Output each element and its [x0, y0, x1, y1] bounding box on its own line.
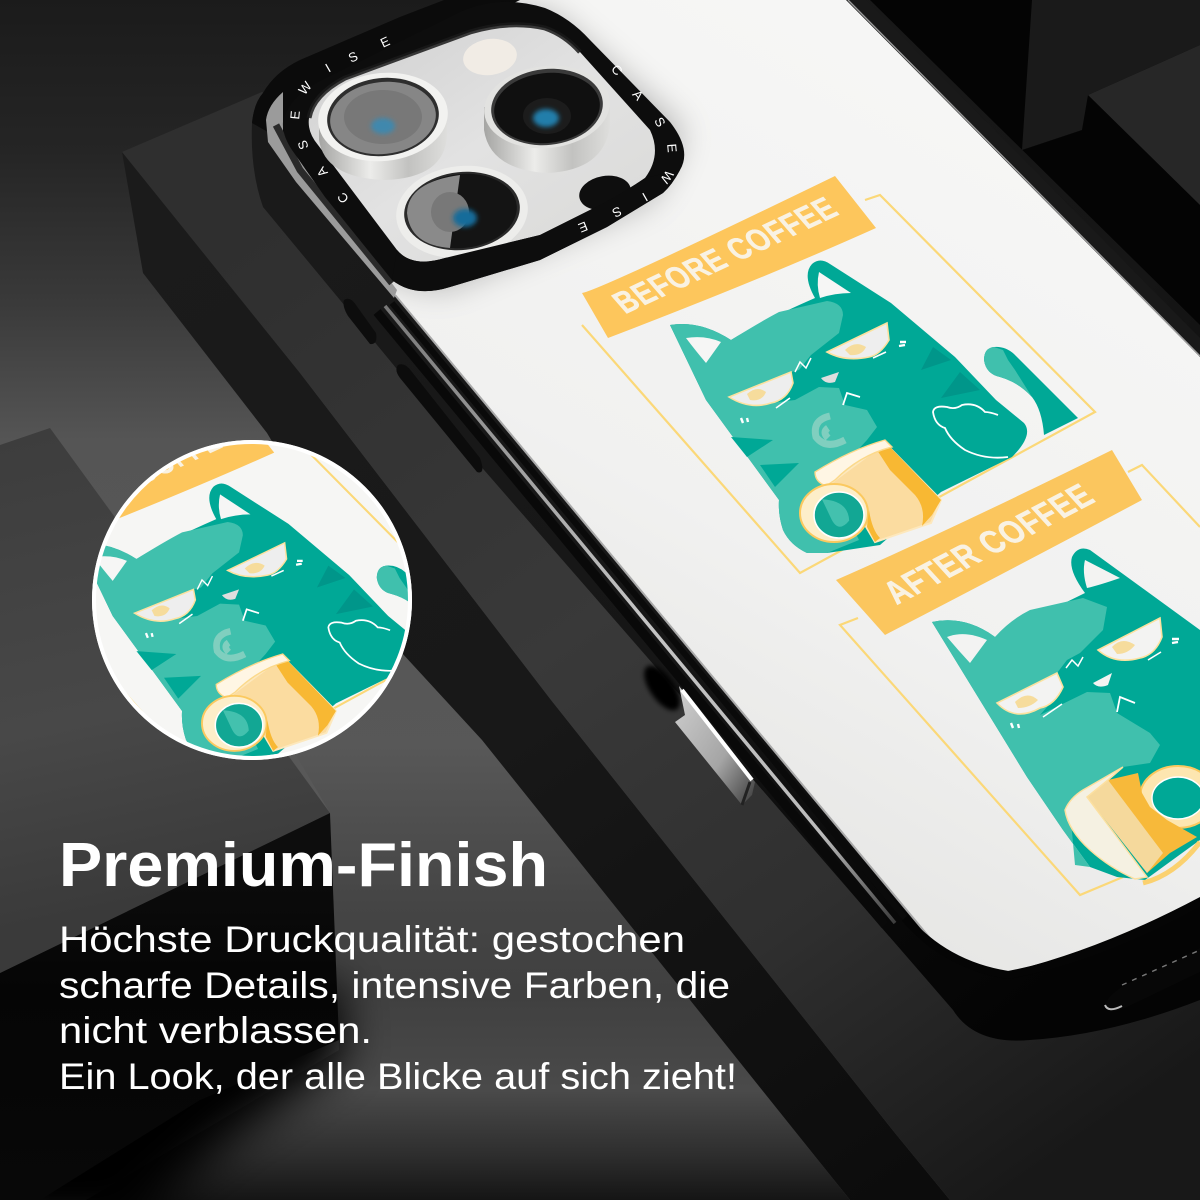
ring text: casewise right [576, 62, 680, 236]
left outer black trim [377, 312, 885, 925]
zoomed artwork [97, 444, 408, 756]
ring text: casewise left [287, 33, 392, 206]
ring text: casewise right: S [651, 114, 669, 130]
ring text: casewise left: W [295, 78, 315, 98]
body text: scharfe Details, intensive Farben, die [59, 965, 730, 1006]
background: top right block [1088, 45, 1200, 205]
artwork: after coffee cat [836, 450, 1200, 895]
bottom corner black trim [905, 902, 1200, 975]
ring text: casewise right: E [576, 218, 590, 236]
phone charging port [1105, 948, 1200, 1011]
button: silver side key recess [637, 660, 687, 716]
button: silver side key [675, 686, 755, 805]
body text: Höchste Druckqualität: gestochen [59, 919, 685, 960]
ring text: casewise left: A [313, 164, 331, 180]
ring text: casewise right: A [629, 87, 647, 103]
phone body [252, 0, 1200, 1041]
ring text: casewise right: E [664, 143, 680, 153]
background: top right black area [840, 0, 1200, 420]
ring text: casewise left: I [323, 61, 333, 75]
phone case [252, 0, 1200, 1041]
left black trim [392, 303, 905, 918]
banner text: before coffee: BEFORE COFFEE [606, 191, 846, 320]
right silver edge [848, 0, 1200, 356]
title: Premium-Finish [59, 831, 548, 900]
body text [59, 919, 737, 1097]
lens 3 [392, 159, 532, 265]
microphone hole [576, 172, 634, 214]
ring text: casewise left: E [378, 33, 392, 51]
phone back white surface [330, 0, 1200, 972]
body text: Ein Look, der alle Blicke auf sich zieht! [59, 1056, 737, 1097]
back grey shadow around camera [392, 0, 695, 304]
background: large block dark face [122, 152, 950, 1200]
ring text: casewise right: C [608, 62, 626, 78]
camera island [283, 2, 684, 291]
lens 2 [480, 60, 614, 173]
banner text: after coffee: AFTER COFFEE [875, 477, 1103, 611]
ring text: casewise left: C [334, 190, 352, 206]
lens 1 [314, 66, 452, 180]
flash [461, 35, 519, 79]
circle base [92, 440, 412, 760]
zoomed artwork: BEFORE COFFEE [16, 417, 245, 540]
magnifier circle [92, 440, 412, 760]
camera ring [283, 2, 684, 291]
ring text: casewise left: E [287, 110, 303, 120]
camera glass inner shadow [309, 25, 580, 118]
background: step front soft shadow [0, 980, 345, 1200]
camera glass [309, 25, 655, 262]
ring text: casewise left: S [294, 138, 312, 152]
background: left step front [0, 813, 339, 1200]
sliver inner dark line [276, 125, 392, 283]
phone right edge band [846, 0, 1200, 358]
background: top right wall [1022, 0, 1200, 150]
button: volume [396, 364, 482, 472]
left grey edge line [395, 295, 934, 943]
background: lit floor [86, 740, 850, 1200]
body text: nicht verblassen. [59, 1010, 372, 1051]
artwork: before coffee cat [582, 176, 1095, 573]
phone top edge black [252, 0, 560, 150]
ring text: casewise right: I [640, 190, 650, 204]
circle border [94, 442, 410, 758]
ring text: casewise right: S [610, 203, 624, 221]
background: left step top [0, 428, 330, 973]
left silver stripe [385, 306, 895, 923]
ring bottom right band [392, 170, 680, 291]
ring text: casewise right: W [657, 168, 677, 187]
button: small hole [344, 299, 376, 344]
grey sliver at camera corner [266, 92, 397, 298]
ring text: casewise left: S [346, 48, 360, 66]
